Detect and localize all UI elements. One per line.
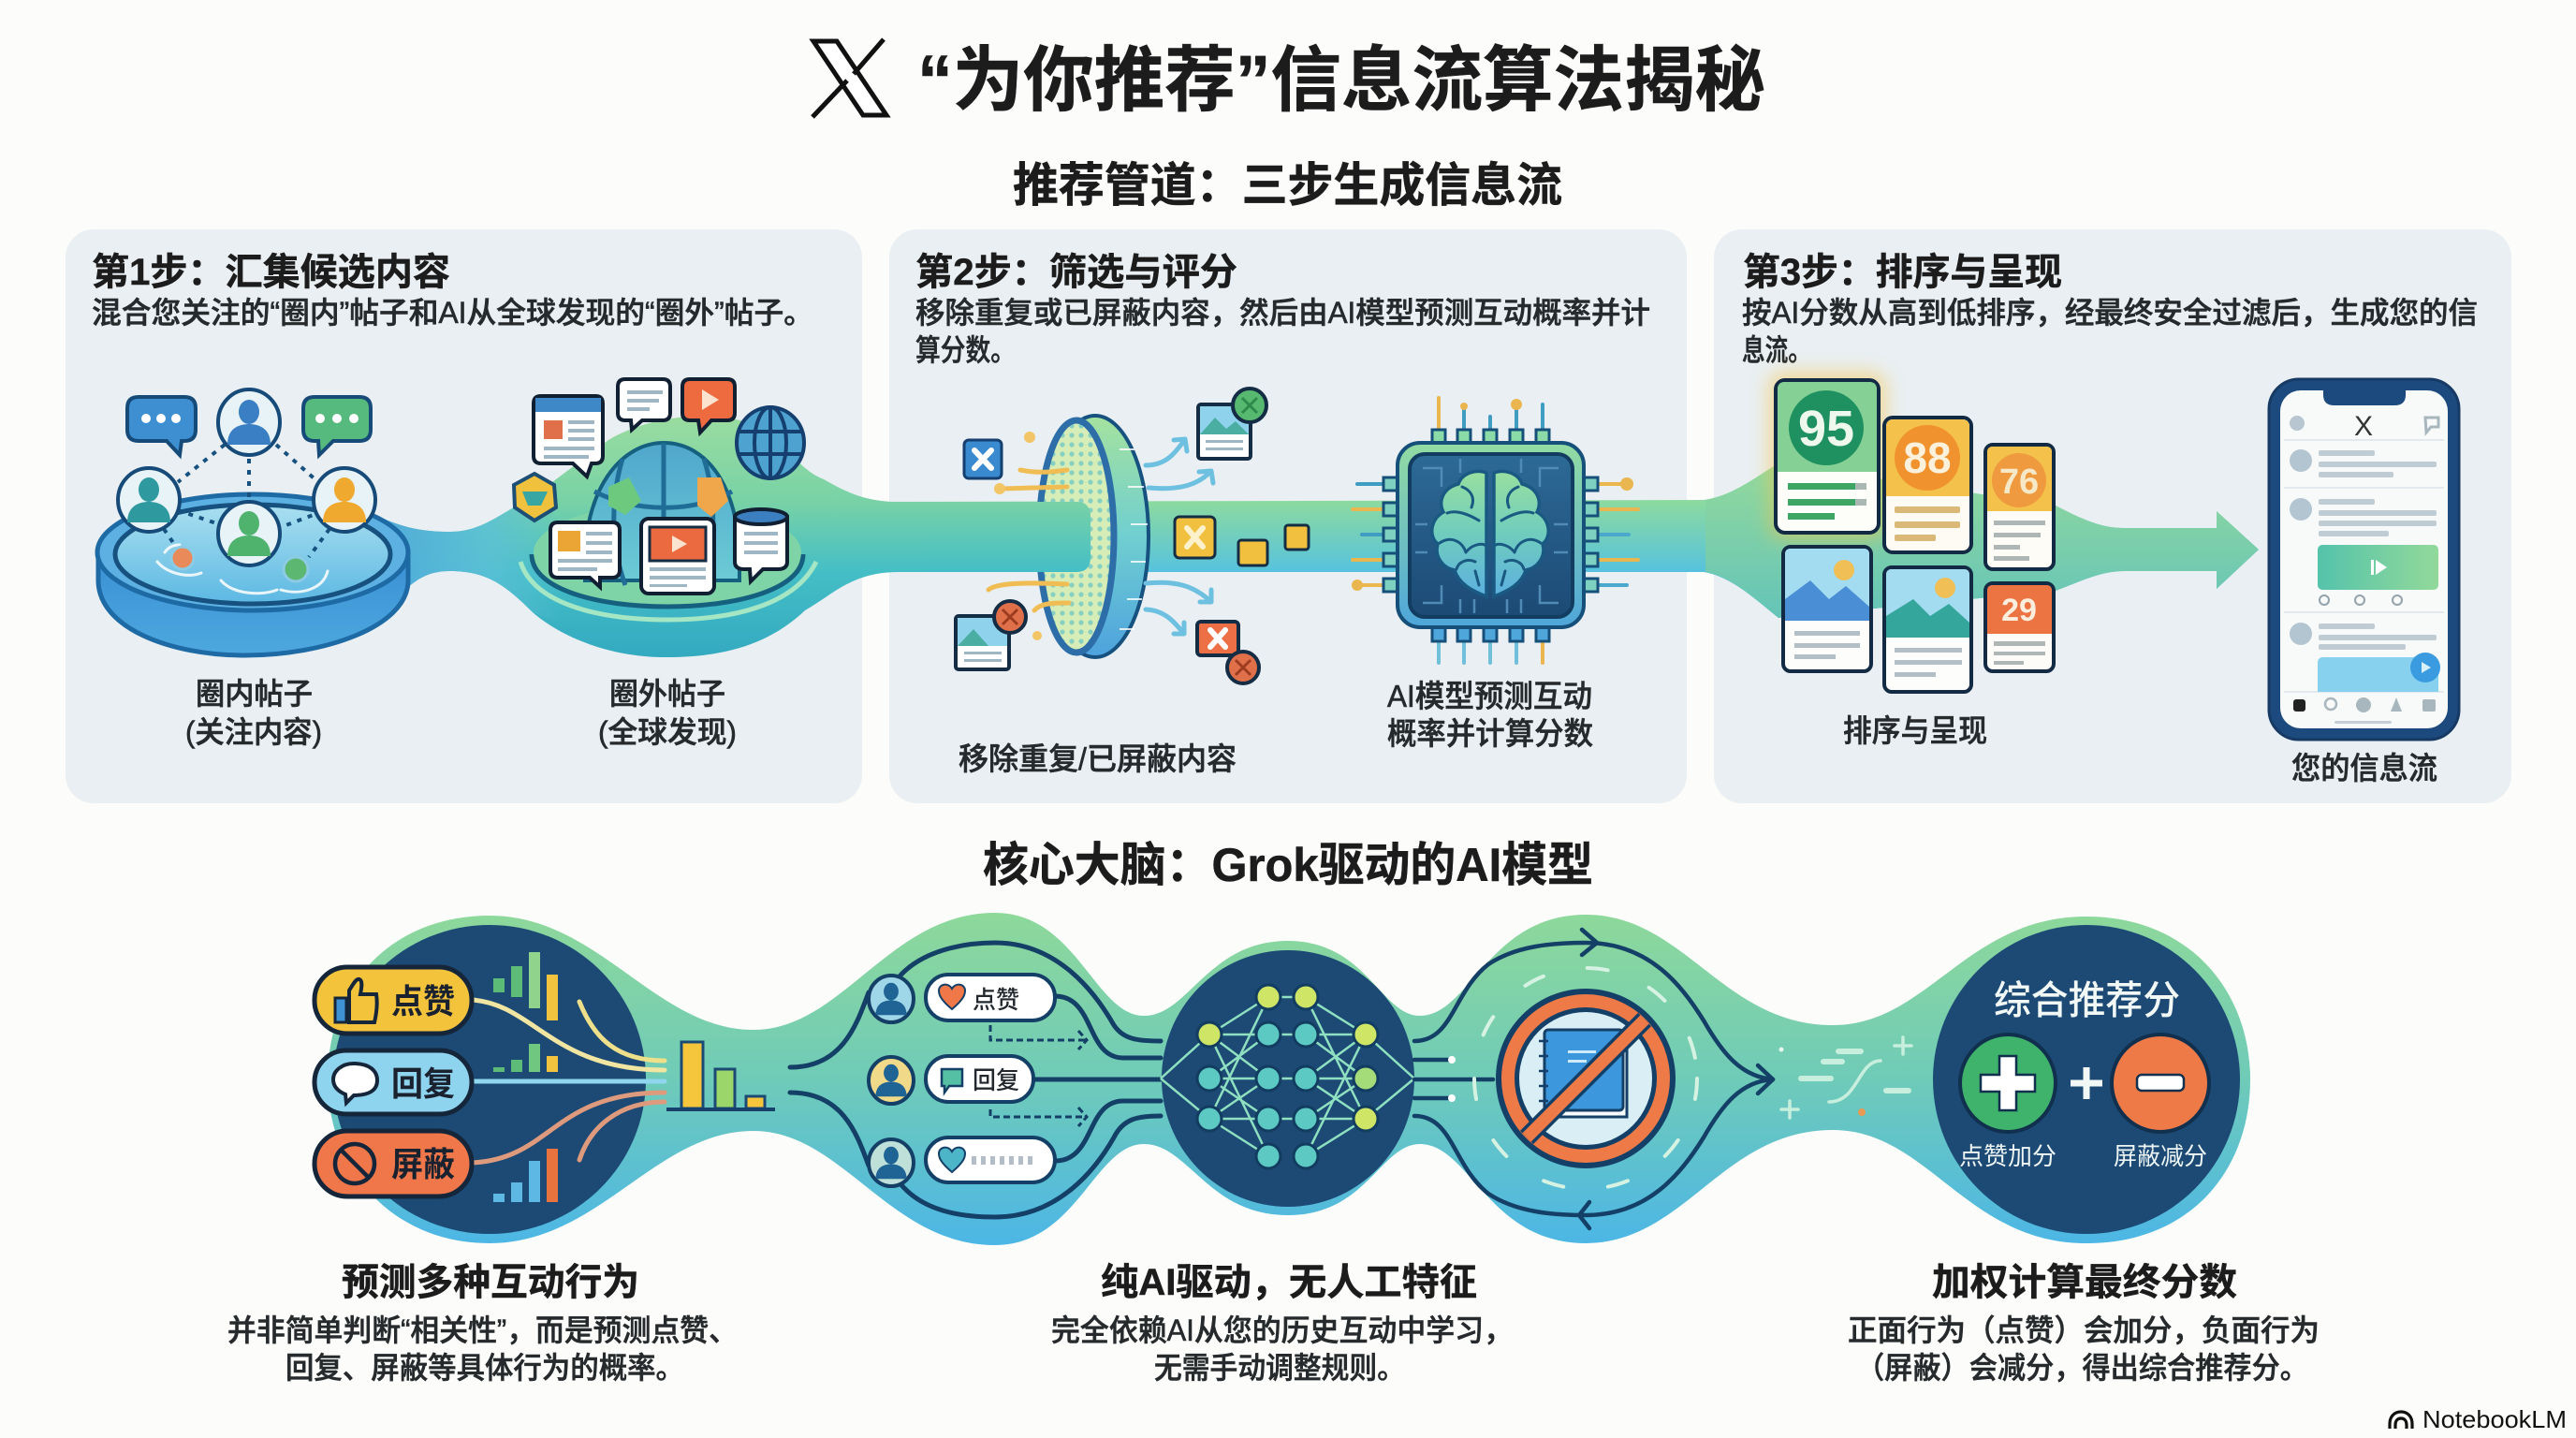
icon: notebook <box>1539 1030 1627 1117</box>
pool rim <box>97 494 408 610</box>
circuit traces <box>1415 459 1568 613</box>
step 3 description: 息流。 <box>1742 333 1811 367</box>
title text: “为你推荐”信息流算法揭秘 <box>917 41 1765 121</box>
chip body <box>1398 443 1584 627</box>
step 1 heading: 第1步：汇集候选内容 <box>92 252 450 293</box>
text block: predict behaviours: 并非简单判断“相关性”，而是预测点赞、 <box>227 1313 738 1347</box>
chip: like <box>926 975 1055 1020</box>
orbit lines and arrows <box>1414 930 1773 1228</box>
pill: block: 屏蔽 <box>391 1145 455 1183</box>
small dots <box>994 432 1042 640</box>
text block: weighted score: （屏蔽）会减分，得出综合推荐分。 <box>1856 1351 2308 1385</box>
label: AI model prediction <box>1387 679 1593 751</box>
illustration: AI chip with brain <box>1352 398 1638 663</box>
prohibit disc <box>1496 989 1676 1168</box>
card: image blue <box>1783 547 1871 671</box>
step 2 heading: 第2步：筛选与评分 <box>915 252 1237 293</box>
label: sort and present: 排序与呈现 <box>1843 713 1987 748</box>
panel: step 3 background <box>1714 229 2511 803</box>
arrows out of filter <box>1146 439 1213 634</box>
avatar: left teal <box>118 468 180 532</box>
bubble: blue chat <box>127 397 196 455</box>
avatar 1 <box>869 976 914 1022</box>
label: out-of-network posts: 圈外帖子 <box>609 677 725 711</box>
text block: predict behaviours: 预测多种互动行为 <box>342 1262 639 1303</box>
step 2 description: 移除重复或已屏蔽内容，然后由AI模型预测互动概率并计 <box>915 296 1650 330</box>
card: image teal <box>1884 567 1971 692</box>
post 1 <box>2290 449 2437 477</box>
illustration: phone feed <box>2269 379 2459 740</box>
label: like bonus: 点赞加分 <box>1959 1142 2056 1170</box>
icon: X logo <box>812 39 886 117</box>
card glow <box>1769 373 1885 539</box>
panel: step 2 background <box>889 229 1687 803</box>
chip: share <box>926 1137 1055 1182</box>
node 1: predict behaviours <box>315 925 665 1234</box>
label: in-network posts <box>185 677 322 749</box>
label: AI model prediction: AI模型预测互动 <box>1387 679 1592 713</box>
app bar: X <box>2354 411 2373 442</box>
illustration: filter <box>927 389 1309 683</box>
flow ribbon: pool to discovery bowl <box>372 417 936 657</box>
step 3 heading: 第3步：排序与呈现 <box>1743 252 2062 293</box>
text block: pure AI <box>1051 1262 1513 1385</box>
text block: pure AI: 完全依赖AI从您的历史互动中学习， <box>1051 1313 1513 1347</box>
post dot: green <box>284 557 308 581</box>
pool body <box>98 552 408 655</box>
pool water <box>115 505 390 604</box>
section heading: pipeline: 推荐管道：三步生成信息流 <box>1013 159 1562 212</box>
rim tick marks <box>1120 449 1148 629</box>
filter back rim <box>1042 416 1149 657</box>
mini bars top <box>493 952 558 1020</box>
post 3 <box>2290 623 2440 692</box>
card: score 95: 95 <box>1798 401 1854 457</box>
bowl inner <box>532 554 803 607</box>
label: block penalty: 屏蔽减分 <box>2114 1142 2207 1170</box>
label: in-network posts: (关注内容) <box>185 715 322 749</box>
line end caps <box>1448 1056 1456 1102</box>
network edges <box>1161 997 1414 1156</box>
pill: like: 点赞 <box>391 982 455 1020</box>
dashed orbit <box>1474 968 1697 1189</box>
icon: blue reject box <box>964 440 1002 478</box>
disc title: 综合推荐分 <box>1994 978 2180 1022</box>
yellow passed box large <box>1175 517 1215 558</box>
icon: operator plus <box>2071 1067 2102 1099</box>
bowl light rim <box>520 562 816 620</box>
node 5: combined score <box>1933 925 2240 1234</box>
icon: bottom-left image card <box>956 601 1026 669</box>
sparks: scoring transition <box>1778 1037 1911 1118</box>
nav bar <box>2293 697 2436 724</box>
step 1 description: 混合您关注的“圈内”帖子和AI从全球发现的“圈外”帖子。 <box>92 296 813 330</box>
dark disc <box>1933 925 2240 1234</box>
icon: NotebookLM <box>2390 1412 2412 1429</box>
pill: reply <box>315 1050 472 1114</box>
label: AI model prediction: 概率并计算分数 <box>1387 716 1593 751</box>
bubble: white text <box>618 379 670 430</box>
bubble: red video <box>682 379 735 433</box>
label: out-of-network posts: (全球发现) <box>598 715 737 749</box>
card: score 88 <box>1884 418 1971 552</box>
app bar <box>2290 411 2438 442</box>
icon: top-right image card <box>1198 389 1266 459</box>
text block: weighted score <box>1848 1262 2320 1385</box>
phone notch <box>2323 390 2406 405</box>
yellow passed box small <box>1238 540 1267 565</box>
mini bars middle <box>493 1044 558 1072</box>
dark disc <box>1162 950 1414 1207</box>
label: out-of-network posts <box>598 677 737 749</box>
pill: block <box>315 1131 472 1196</box>
chip pins and traces <box>1352 398 1638 663</box>
card: article <box>550 522 620 587</box>
text block: pure AI: 纯AI驱动，无人工特征 <box>1101 1262 1477 1303</box>
step 3 description <box>1742 296 2478 367</box>
mini bars bottom <box>493 1149 558 1202</box>
label: your feed: 您的信息流 <box>2291 751 2437 785</box>
network nodes <box>1197 985 1378 1168</box>
track lines <box>790 943 1161 1217</box>
prohibit slash <box>1527 1020 1645 1137</box>
card: score 29: 29 <box>2001 593 2037 628</box>
card: score 76 <box>1985 445 2054 569</box>
avatar 2 <box>869 1057 914 1104</box>
incoming yellow lines <box>988 470 1069 610</box>
post dot: orange <box>171 547 194 569</box>
flow ribbon: step 3 arrow <box>1705 463 2259 618</box>
dashed arrow 1 <box>990 1025 1087 1049</box>
chip core <box>1410 454 1573 617</box>
dividers <box>2284 439 2444 693</box>
avatar: top blue <box>218 389 280 455</box>
text block: weighted score: 加权计算最终分数 <box>1932 1262 2237 1303</box>
dark disc <box>333 925 646 1234</box>
card: score 29 <box>1985 583 2054 671</box>
pipeline shell <box>328 913 2250 1245</box>
watermark: NotebookLM: NotebookLM <box>2422 1405 2567 1433</box>
icon: bottom-right red box <box>1197 622 1259 683</box>
step 3 description: 按AI分数从高到低排序，经最终安全过滤后，生成您的信 <box>1742 296 2478 330</box>
chip: reply <box>926 1056 1033 1102</box>
step 2 description: 算分数。 <box>915 333 1016 367</box>
icon: plus <box>1960 1034 2056 1132</box>
avatar: middle green <box>218 502 280 565</box>
card: score 95 <box>1776 380 1879 533</box>
node 2: behaviour tracks <box>790 943 1161 1217</box>
flow ribbon: through filter and chip to arrow <box>880 463 2259 618</box>
node 3: neural network <box>1161 950 1414 1207</box>
bar chart: predicted probabilities <box>666 1042 775 1111</box>
text block: weighted score: 正面行为（点赞）会加分，负面行为 <box>1848 1313 2320 1347</box>
post 2 <box>2290 498 2438 605</box>
illustration: in-network pool <box>97 389 408 655</box>
icon: small globe <box>737 407 804 478</box>
filter mesh opening <box>1039 420 1114 653</box>
phone screen <box>2280 390 2448 728</box>
pill: reply: 回复 <box>391 1064 455 1103</box>
illustration: ranked cards <box>1769 373 2054 692</box>
text block: predict behaviours: 回复、屏蔽等具体行为的概率。 <box>285 1351 684 1385</box>
icon: minus <box>2112 1034 2209 1132</box>
panel: step 1 background <box>66 229 862 803</box>
card: video <box>641 519 714 594</box>
bubble: green chat <box>303 397 371 455</box>
water ripples <box>157 545 328 594</box>
core pipeline <box>315 913 2250 1245</box>
avatar 3 <box>869 1139 914 1186</box>
step 2 description <box>915 296 1650 367</box>
illustration: out-of-network global bowl <box>514 379 816 620</box>
card: score 88: 88 <box>1903 433 1952 482</box>
card: score 76: 76 <box>1999 462 2039 502</box>
section heading: core brain: 核心大脑：Grok驱动的AI模型 <box>983 839 1593 891</box>
pill: like <box>315 967 472 1034</box>
chip: reply: 回复 <box>973 1066 1019 1094</box>
icon: yellow hexagon <box>514 474 556 521</box>
connection lines <box>164 445 329 557</box>
globe dome <box>585 443 739 585</box>
avatar: right orange <box>314 468 375 532</box>
icon: brain <box>1432 472 1548 596</box>
icon: database bubble <box>735 509 787 581</box>
flow curves <box>472 1000 665 1163</box>
dashed arrow 2 <box>990 1108 1087 1126</box>
text block: pure AI: 无需手动调整规则。 <box>1154 1351 1405 1385</box>
chip: like: 点赞 <box>973 986 1019 1014</box>
phone frame <box>2269 379 2459 740</box>
label: in-network posts: 圈内帖子 <box>196 677 313 711</box>
bubble: news top-left <box>534 396 603 477</box>
incoming pipe <box>927 502 1090 572</box>
title <box>812 39 1765 121</box>
label: remove duplicates: 移除重复/已屏蔽内容 <box>959 741 1237 776</box>
yellow passed box small 2 <box>1285 525 1309 550</box>
text block: predict behaviours <box>227 1262 738 1385</box>
node 4: no manual rules <box>1414 930 1773 1228</box>
